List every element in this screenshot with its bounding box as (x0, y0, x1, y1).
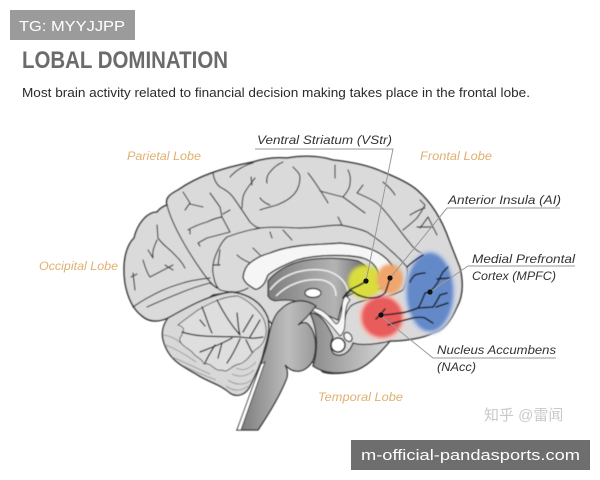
mpfc label: Medial Prefrontal (472, 252, 575, 266)
parietal lobe label: Parietal Lobe (127, 149, 201, 163)
thalamus oval (305, 288, 321, 298)
occipital lobe label: Occipital Lobe (39, 259, 118, 273)
white channel (308, 296, 350, 336)
red region (360, 295, 404, 339)
zhihu watermark: 知乎 @雷闻 (484, 407, 563, 424)
leader lines (255, 149, 575, 358)
sulci (131, 162, 437, 320)
top-left tag (10, 10, 135, 40)
ventral striatum label: Ventral Striatum (VStr) (257, 133, 392, 147)
region labels: (NAcc) (437, 360, 476, 374)
brain illustration (124, 156, 462, 430)
frontal lobe label: Frontal Lobe (420, 149, 492, 163)
marker dots (363, 275, 433, 318)
brainstem (237, 301, 316, 430)
nacc label: Nucleus Accumbens (437, 343, 556, 357)
corpus callosum (243, 243, 394, 298)
bottom-right tag: m-official-pandasports.com (361, 447, 580, 464)
orange region (377, 264, 403, 294)
cerebellum folds (163, 296, 266, 390)
region labels: Cortex (MPFC) (472, 269, 556, 283)
pituitary bulb (331, 338, 345, 352)
yellow region (348, 265, 382, 299)
title: LOBAL DOMINATION (22, 47, 228, 74)
top-left tag: TG: MYYJJPP (19, 18, 125, 35)
upper diencephalon (268, 258, 371, 320)
lower temporal region (310, 313, 390, 373)
blue region (405, 251, 455, 333)
cerebellum (162, 292, 269, 395)
bottom-right tag (351, 440, 590, 470)
thalamic arcs (270, 270, 348, 296)
region labels (257, 133, 575, 374)
cerebrum outline (124, 156, 462, 373)
temporal lobe label: Temporal Lobe (318, 390, 403, 404)
dark tracts (343, 255, 450, 325)
arbor vitae (182, 300, 263, 363)
lobe labels (39, 149, 492, 404)
anterior insula label: Anterior Insula (AI) (447, 193, 561, 207)
white sliver by stem (237, 362, 265, 430)
subtitle: Most brain activity related to financial decision making takes place in the frontal lobe. (22, 86, 530, 100)
